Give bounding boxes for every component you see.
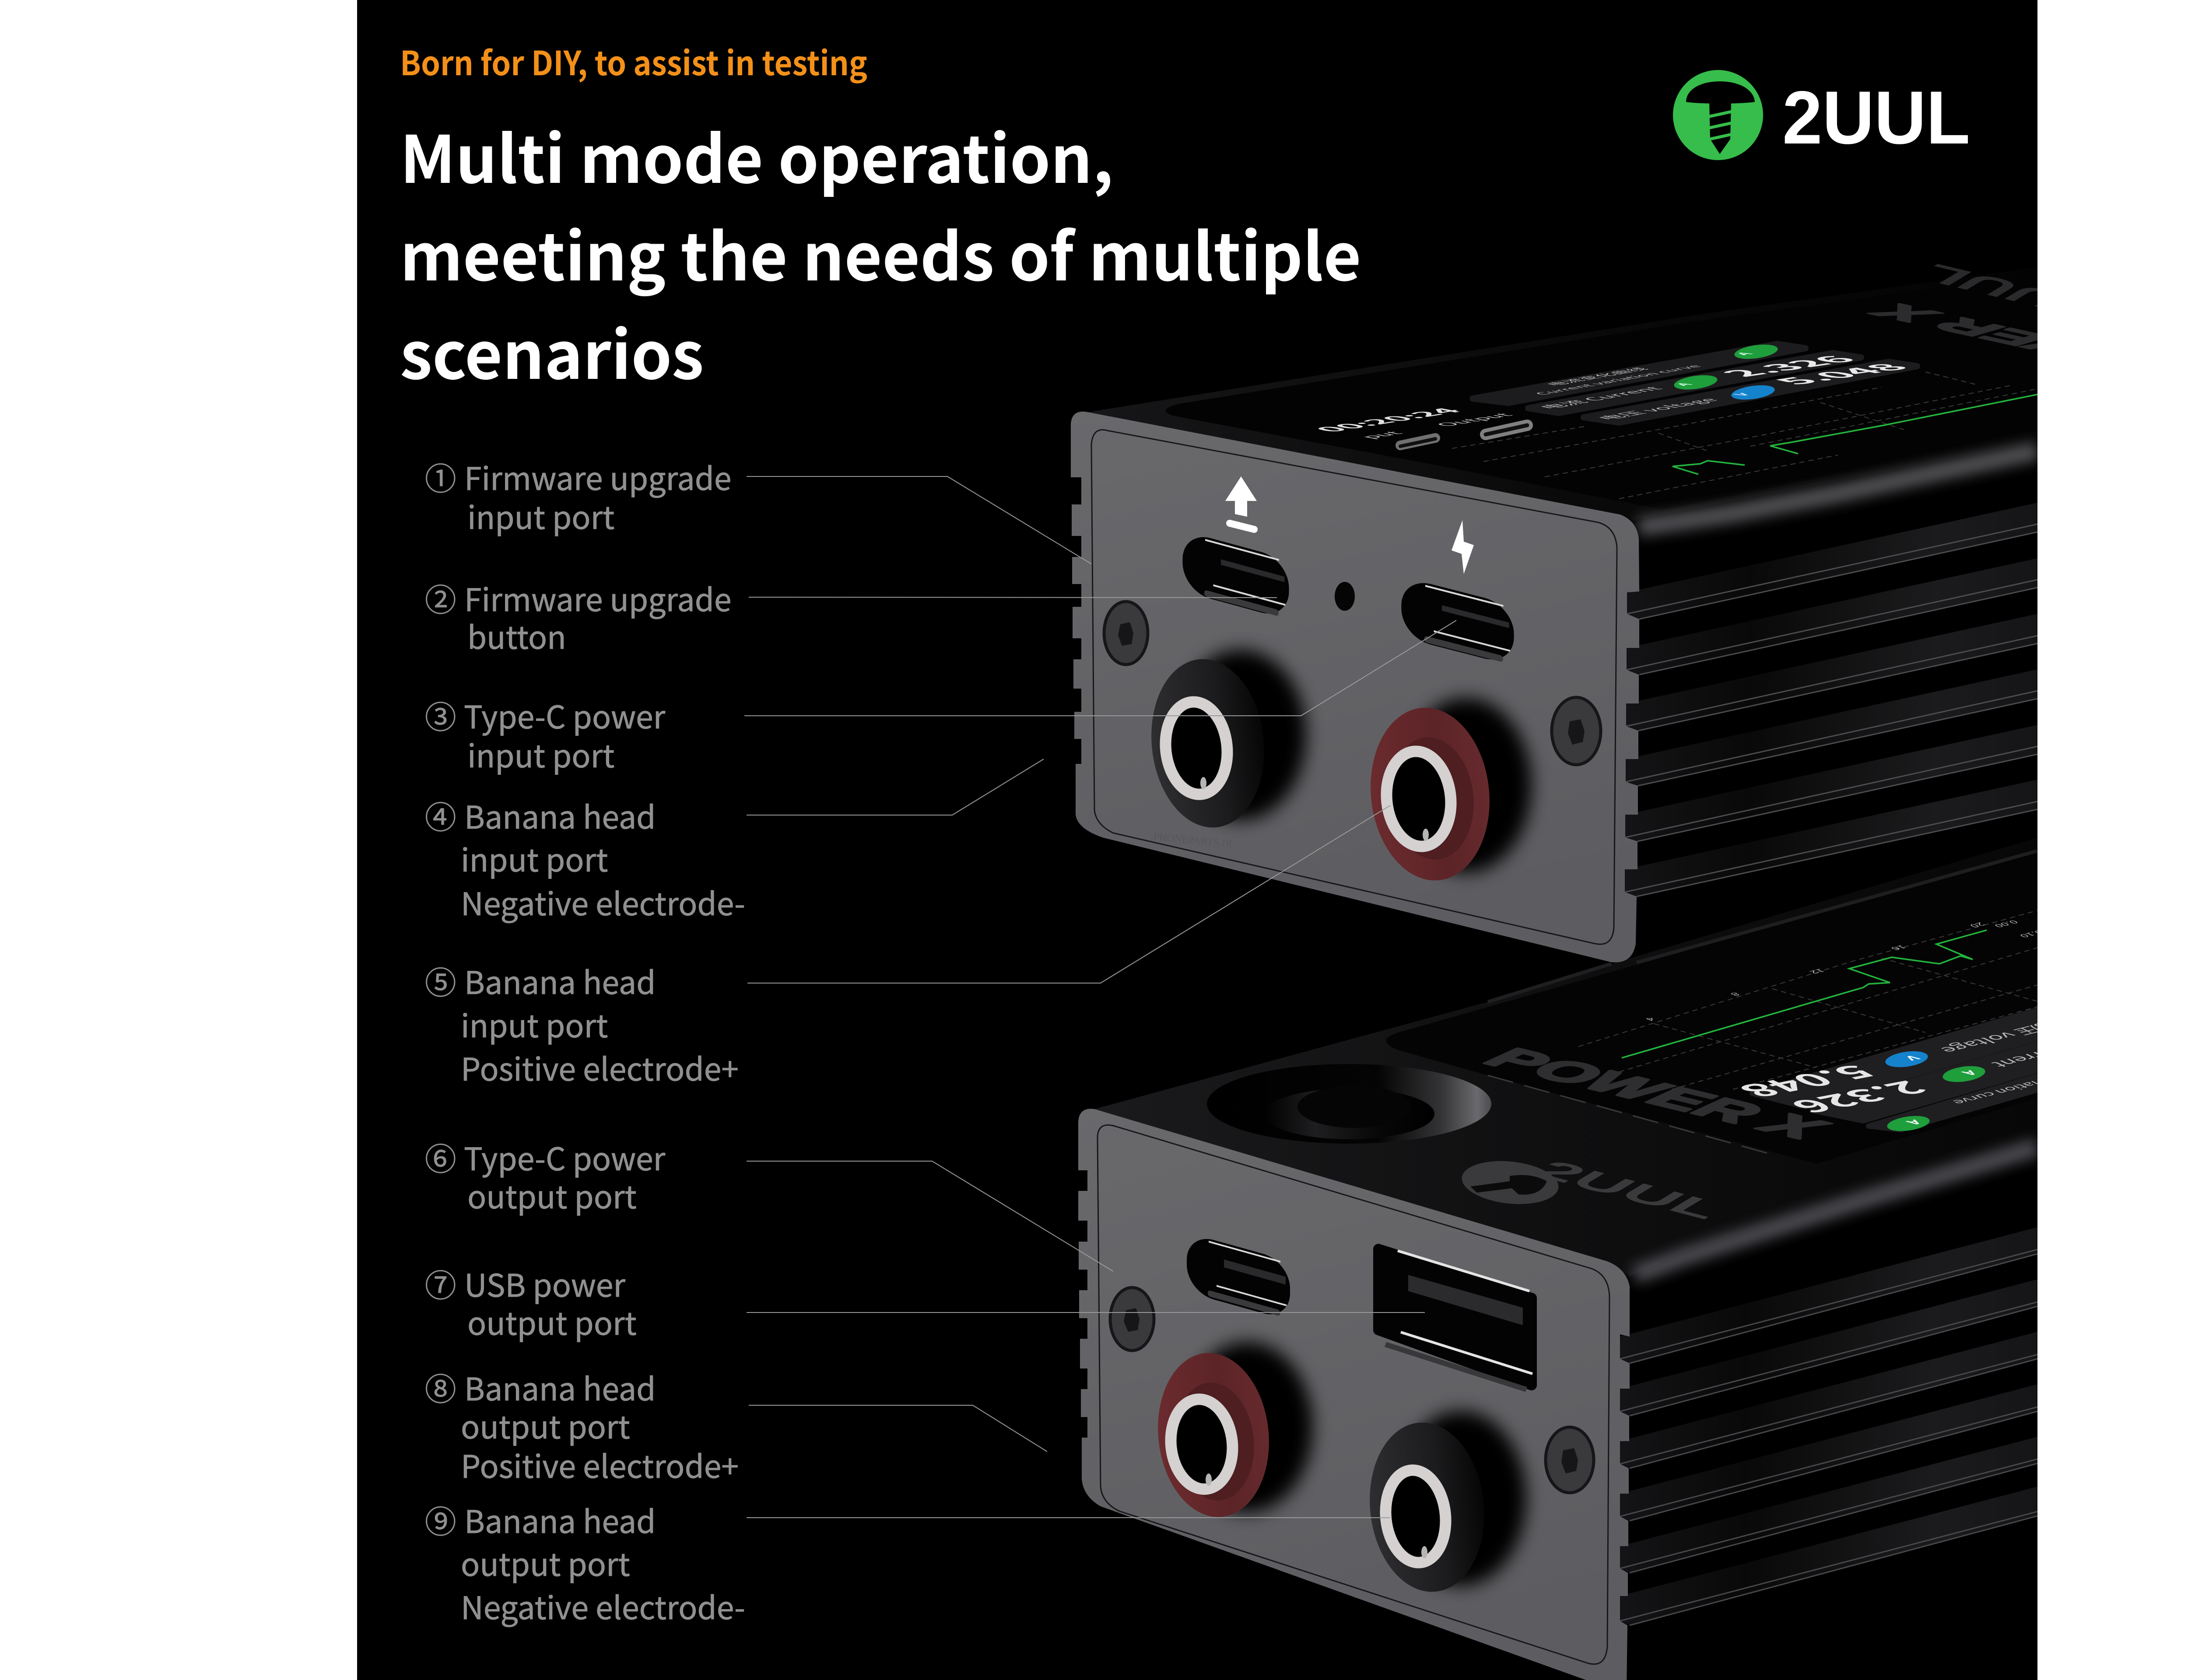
port: upper red banana input — [1362, 698, 1532, 886]
label 7: USB power output port: ⑦ — [425, 1260, 456, 1306]
lower unit faceplate inset outline — [1098, 1125, 1609, 1664]
lower unit current badge: A — [1958, 1069, 1983, 1078]
upper unit curve badge — [1730, 342, 1779, 361]
icon: upper unit output port — [1486, 425, 1527, 434]
lower unit edge highlight — [1634, 1147, 2037, 1275]
lower unit voltage reading: 5.048 — [1726, 1060, 1892, 1104]
port: upper USB-C firmware input — [1182, 531, 1289, 620]
screw: upper left — [1104, 602, 1148, 665]
upper unit current curve — [1673, 394, 2039, 474]
label 2: firmware upgrade button: Firmware upgrade — [464, 575, 732, 620]
lower unit dashed line — [1488, 1075, 1777, 1156]
upper unit curve subtitle: Current variation curve — [1529, 364, 1706, 396]
leader line 6 — [747, 1161, 1113, 1271]
lower unit graph tick labels: 20 — [1967, 921, 1988, 929]
lower unit screen glass — [1386, 927, 1821, 1164]
leader line 4 — [747, 759, 1044, 815]
icon: firmware upload arrow — [1225, 476, 1257, 529]
lower unit logo badge — [1460, 1157, 1560, 1208]
lower unit graph tick labels: 0.10 — [2016, 929, 2047, 939]
label 6: Type-C power output port: Type-C power — [464, 1134, 666, 1180]
leader line 8 — [749, 1405, 1047, 1452]
upper unit voltage badge: V — [1728, 392, 1755, 397]
label 5: banana head input positive: Banana head — [464, 958, 656, 1003]
label 5: banana head input positive: ⑤ — [425, 958, 456, 1003]
upper unit faceplate — [1071, 412, 1639, 962]
upper unit 2UUL brand: 2UUL — [1906, 259, 2114, 322]
lower unit curve badge — [1886, 1113, 1931, 1134]
label 4: banana head input negative — [425, 792, 745, 924]
port: lower black banana output — [1361, 1411, 1526, 1598]
main title: scenarios — [400, 303, 704, 398]
leader line 3 — [744, 620, 1456, 716]
logo screw badge — [1673, 70, 1763, 160]
label 5: banana head input positive — [425, 958, 739, 1090]
upper unit bottom edge highlight — [1637, 851, 2037, 962]
label 6: Type-C power output port: ⑥ — [425, 1134, 456, 1180]
upper unit current badge — [1669, 373, 1718, 392]
upper unit cooling fins — [1625, 503, 2037, 896]
lower unit readout pills — [1752, 1009, 2039, 1130]
leader line 9 — [747, 1517, 1390, 1518]
upper unit voltage reading: 5.048 — [1757, 360, 1922, 387]
lower unit voltage badge — [1884, 1049, 1929, 1070]
lower unit curve label: Current variation curve — [1949, 1060, 2123, 1107]
label 2: firmware upgrade button — [425, 575, 732, 658]
label 9: banana head output negative: output port — [461, 1540, 630, 1585]
upper unit voltage badge — [1728, 383, 1776, 402]
main title — [400, 107, 1361, 398]
label 4: banana head input negative: input port — [461, 835, 608, 881]
label 3: Type-C power input port: Type-C power — [464, 692, 666, 738]
upper unit current label: 电流 Current — [1531, 385, 1668, 410]
upper unit readout pills — [1473, 344, 1917, 423]
icon: upper unit input port — [1400, 438, 1435, 446]
port: upper black banana input — [1143, 650, 1306, 833]
label 9: banana head output negative: Banana head — [464, 1497, 656, 1542]
port: lower USB-C output — [1187, 1232, 1290, 1321]
label 8: banana head output positive: Banana head — [464, 1364, 656, 1410]
logo wordmark: 2UUL — [1782, 76, 1970, 160]
label 9: banana head output negative — [425, 1497, 745, 1628]
leader line 2 — [749, 597, 1277, 598]
lower unit graph tick labels: 0.00 — [1991, 919, 2022, 929]
upper unit output label: Output — [1428, 412, 1518, 427]
lower unit graph tick labels: 16 — [1888, 944, 1910, 952]
lower unit current badge — [1942, 1064, 1986, 1085]
label 6: Type-C power output port: output port — [467, 1172, 637, 1218]
label 2: firmware upgrade button: button — [467, 612, 566, 658]
label 4: banana head input negative: Banana head — [464, 792, 656, 838]
label 3: Type-C power input port — [425, 692, 666, 777]
upper unit top surface — [1088, 267, 2037, 520]
lower unit current label: 电流 Current — [1986, 1032, 2123, 1071]
devices clipped to band — [1071, 264, 2037, 1680]
device: upper unit (input side) — [1071, 259, 2188, 962]
lower unit curve badge: A — [1902, 1118, 1928, 1127]
upper unit curve title: 电流变化曲线 — [1540, 366, 1653, 387]
lower unit faceplate — [1078, 1109, 1630, 1680]
label 9: banana head output negative: ⑨ — [425, 1497, 456, 1542]
upper unit curve badge: A — [1730, 351, 1757, 356]
logo: 2UUL — [1673, 70, 1970, 160]
label 7: USB power output port — [425, 1260, 637, 1344]
lower unit graph tick labels: 8 — [1727, 991, 1743, 998]
label 8: banana head output positive: output port — [461, 1402, 630, 1448]
label 1: firmware upgrade input port: Firmware upgrade — [464, 454, 732, 499]
lower unit cooling fins — [1620, 1227, 2037, 1625]
lower unit graph tick labels — [1642, 919, 2047, 1022]
label 1: firmware upgrade input port: ① — [425, 454, 456, 499]
lower unit current reading: 2.326 — [1778, 1076, 1944, 1120]
port: firmware upgrade button — [1335, 582, 1355, 611]
device: lower unit (output side) — [1078, 854, 2037, 1680]
upper unit current badge: A — [1669, 382, 1697, 387]
port: lower USB-A output — [1378, 1249, 1532, 1390]
main title: Multi mode operation, — [400, 107, 1114, 202]
upper unit input label: put — [1353, 430, 1408, 440]
label 9: banana head output negative: Negative electrode- — [461, 1583, 745, 1628]
label 5: banana head input positive: input port — [461, 1001, 608, 1046]
label 7: USB power output port: output port — [467, 1298, 637, 1344]
leader line 1 — [747, 476, 1091, 564]
lower unit knob — [1207, 1064, 1491, 1144]
screw: lower left — [1110, 1288, 1154, 1351]
label 2: firmware upgrade button: ② — [425, 575, 456, 620]
label 5: banana head input positive: Positive electrode+ — [461, 1044, 739, 1090]
screw: upper right — [1552, 697, 1601, 765]
upper unit edge highlight — [1639, 451, 2037, 527]
port: lower red banana output — [1150, 1342, 1313, 1522]
upper unit screen glass — [1166, 273, 2037, 510]
upper unit graph grid — [1452, 372, 2035, 499]
lower unit POWER X brand: POWER X — [1476, 1041, 1839, 1146]
upper unit faceplate inset outline — [1091, 430, 1617, 944]
icon: power bolt — [1452, 520, 1474, 574]
label 4: banana head input negative: Negative electrode- — [461, 879, 745, 924]
lower unit top surface — [1094, 838, 2037, 1277]
black page band — [357, 0, 2037, 1680]
lower unit voltage badge: V — [1900, 1054, 1926, 1063]
label 6: Type-C power output port — [425, 1134, 666, 1218]
leader line 7 — [747, 1312, 1425, 1313]
lower unit voltage label: 电压 voltage — [1935, 1018, 2069, 1056]
label 7: USB power output port: USB power — [464, 1260, 625, 1306]
label 8: banana head output positive — [425, 1364, 739, 1487]
lower unit graph tick labels: 12 — [1806, 967, 1828, 975]
upper unit timer: 00:20:24 — [1302, 406, 1471, 434]
lower unit graph tick labels: 4 — [1642, 1016, 1659, 1022]
label 1: firmware upgrade input port — [425, 454, 732, 538]
lower unit current curve — [1622, 930, 1987, 1058]
label 3: Type-C power input port: ③ — [425, 692, 456, 738]
watermark: PHONEPARTS.IR — [1153, 831, 1233, 850]
label 4: banana head input negative: ④ — [425, 792, 456, 838]
port: upper USB-C power input — [1401, 577, 1514, 666]
lower unit graph grid — [1578, 910, 2039, 1089]
kicker line: Born for DIY, to assist in testing — [400, 37, 867, 85]
upper unit current reading: 2.326 — [1704, 353, 1869, 379]
label 1: firmware upgrade input port: input port — [467, 493, 614, 538]
label 8: banana head output positive: Positive electrode+ — [461, 1442, 739, 1487]
lower unit far edge highlight — [1488, 964, 1611, 1002]
screw: lower right — [1546, 1427, 1594, 1493]
main title: meeting the needs of multiple — [400, 205, 1361, 299]
lower unit 2UUL brand: 2UUL — [1522, 1155, 1737, 1224]
label 3: Type-C power input port: input port — [467, 731, 614, 777]
leader line 5 — [747, 805, 1390, 983]
upper unit voltage label: 电压 voltage — [1589, 396, 1724, 421]
label 8: banana head output positive: ⑧ — [425, 1364, 456, 1410]
